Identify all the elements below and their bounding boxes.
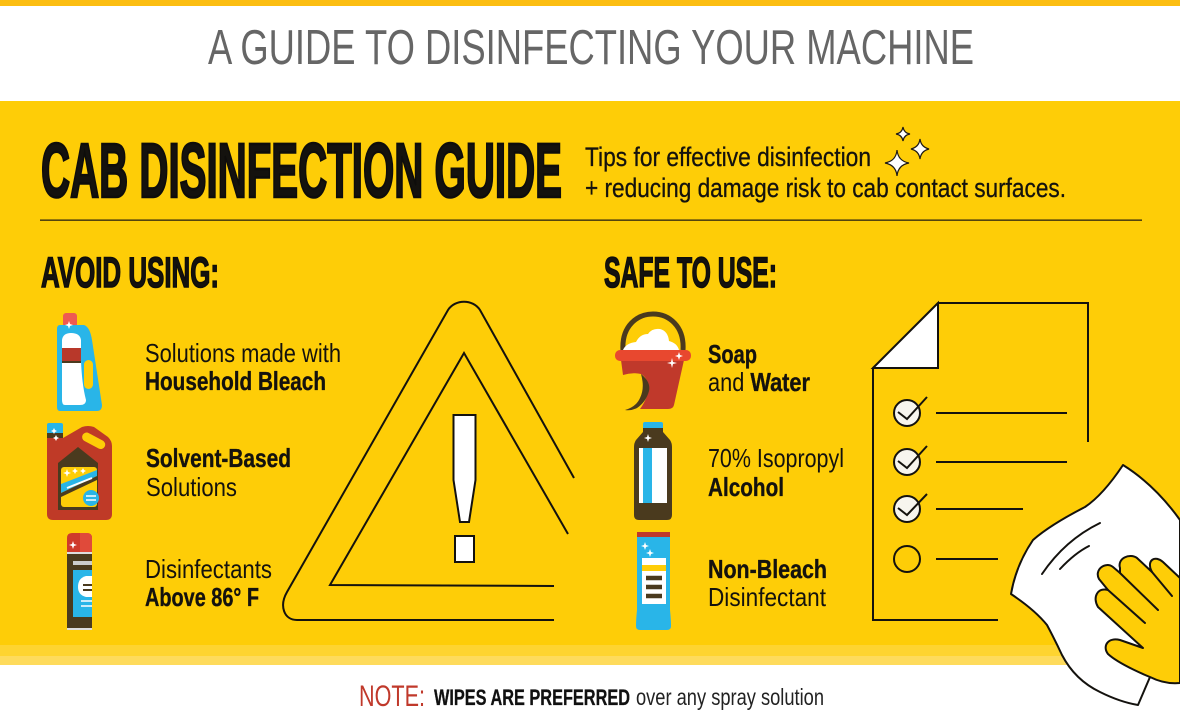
- icon: alcohol bottle: [634, 422, 672, 520]
- text: household bleach: [145, 338, 341, 396]
- text: household bleach: Solutions made with: [145, 338, 341, 368]
- note: over any spray solution: [636, 684, 824, 710]
- heading: avoid using: AVOID USING:: [41, 249, 219, 297]
- text: isopropyl alcohol: Alcohol: [708, 472, 784, 502]
- icon: sparkles: [885, 127, 929, 176]
- icon: non-bleach bottle: [636, 532, 671, 630]
- text: non-bleach disinfectant: Disinfectant: [708, 582, 827, 612]
- note: WIPES ARE PREFERRED: [434, 685, 630, 710]
- text: soap and water: [708, 339, 810, 397]
- text: disinfectants: Above 86° F: [145, 582, 259, 612]
- check row 1: [894, 397, 1067, 426]
- icon: warning triangle: [283, 302, 574, 620]
- icon: checklist document: [873, 303, 1088, 620]
- text: non-bleach disinfectant: Non-Bleach: [708, 554, 827, 584]
- icon: bleach bottle: [57, 313, 102, 411]
- subheading: [585, 142, 1066, 203]
- note: [359, 680, 824, 713]
- divider: [40, 220, 1142, 221]
- text: disinfectants: [145, 554, 272, 612]
- text: solvent based: [146, 443, 291, 502]
- text: non-bleach disinfectant: [708, 554, 827, 612]
- icon: solvent jug: [47, 423, 112, 520]
- check row 2: [894, 446, 1067, 475]
- subheading: + reducing damage risk to cab contact surfaces.: [585, 173, 1066, 203]
- text: solvent based: Solvent-Based: [146, 443, 291, 473]
- note: NOTE:: [359, 680, 425, 713]
- text: soap and water: Soap: [708, 339, 757, 369]
- top accent bar: [0, 0, 1180, 6]
- text: isopropyl alcohol: [708, 443, 844, 502]
- heading: safe to use: SAFE TO USE:: [604, 249, 777, 297]
- icon: wipe and gloved hand: [1011, 465, 1180, 705]
- check row 4: [894, 546, 998, 572]
- check row 3: [894, 494, 1023, 522]
- subheading: Tips for effective disinfection: [585, 142, 871, 172]
- text: soap and water: and Water: [708, 367, 810, 397]
- yellow main panel: [0, 101, 1180, 665]
- text: household bleach: Household Bleach: [145, 366, 326, 396]
- text: isopropyl alcohol: 70% Isopropyl: [708, 443, 844, 473]
- main heading: CAB DISINFECTION GUIDE: [41, 128, 562, 214]
- text: solvent based: Solutions: [146, 472, 237, 502]
- icon: spray can: [67, 533, 92, 630]
- icon: soap bucket: [615, 314, 691, 410]
- text: disinfectants: Disinfectants: [145, 554, 272, 584]
